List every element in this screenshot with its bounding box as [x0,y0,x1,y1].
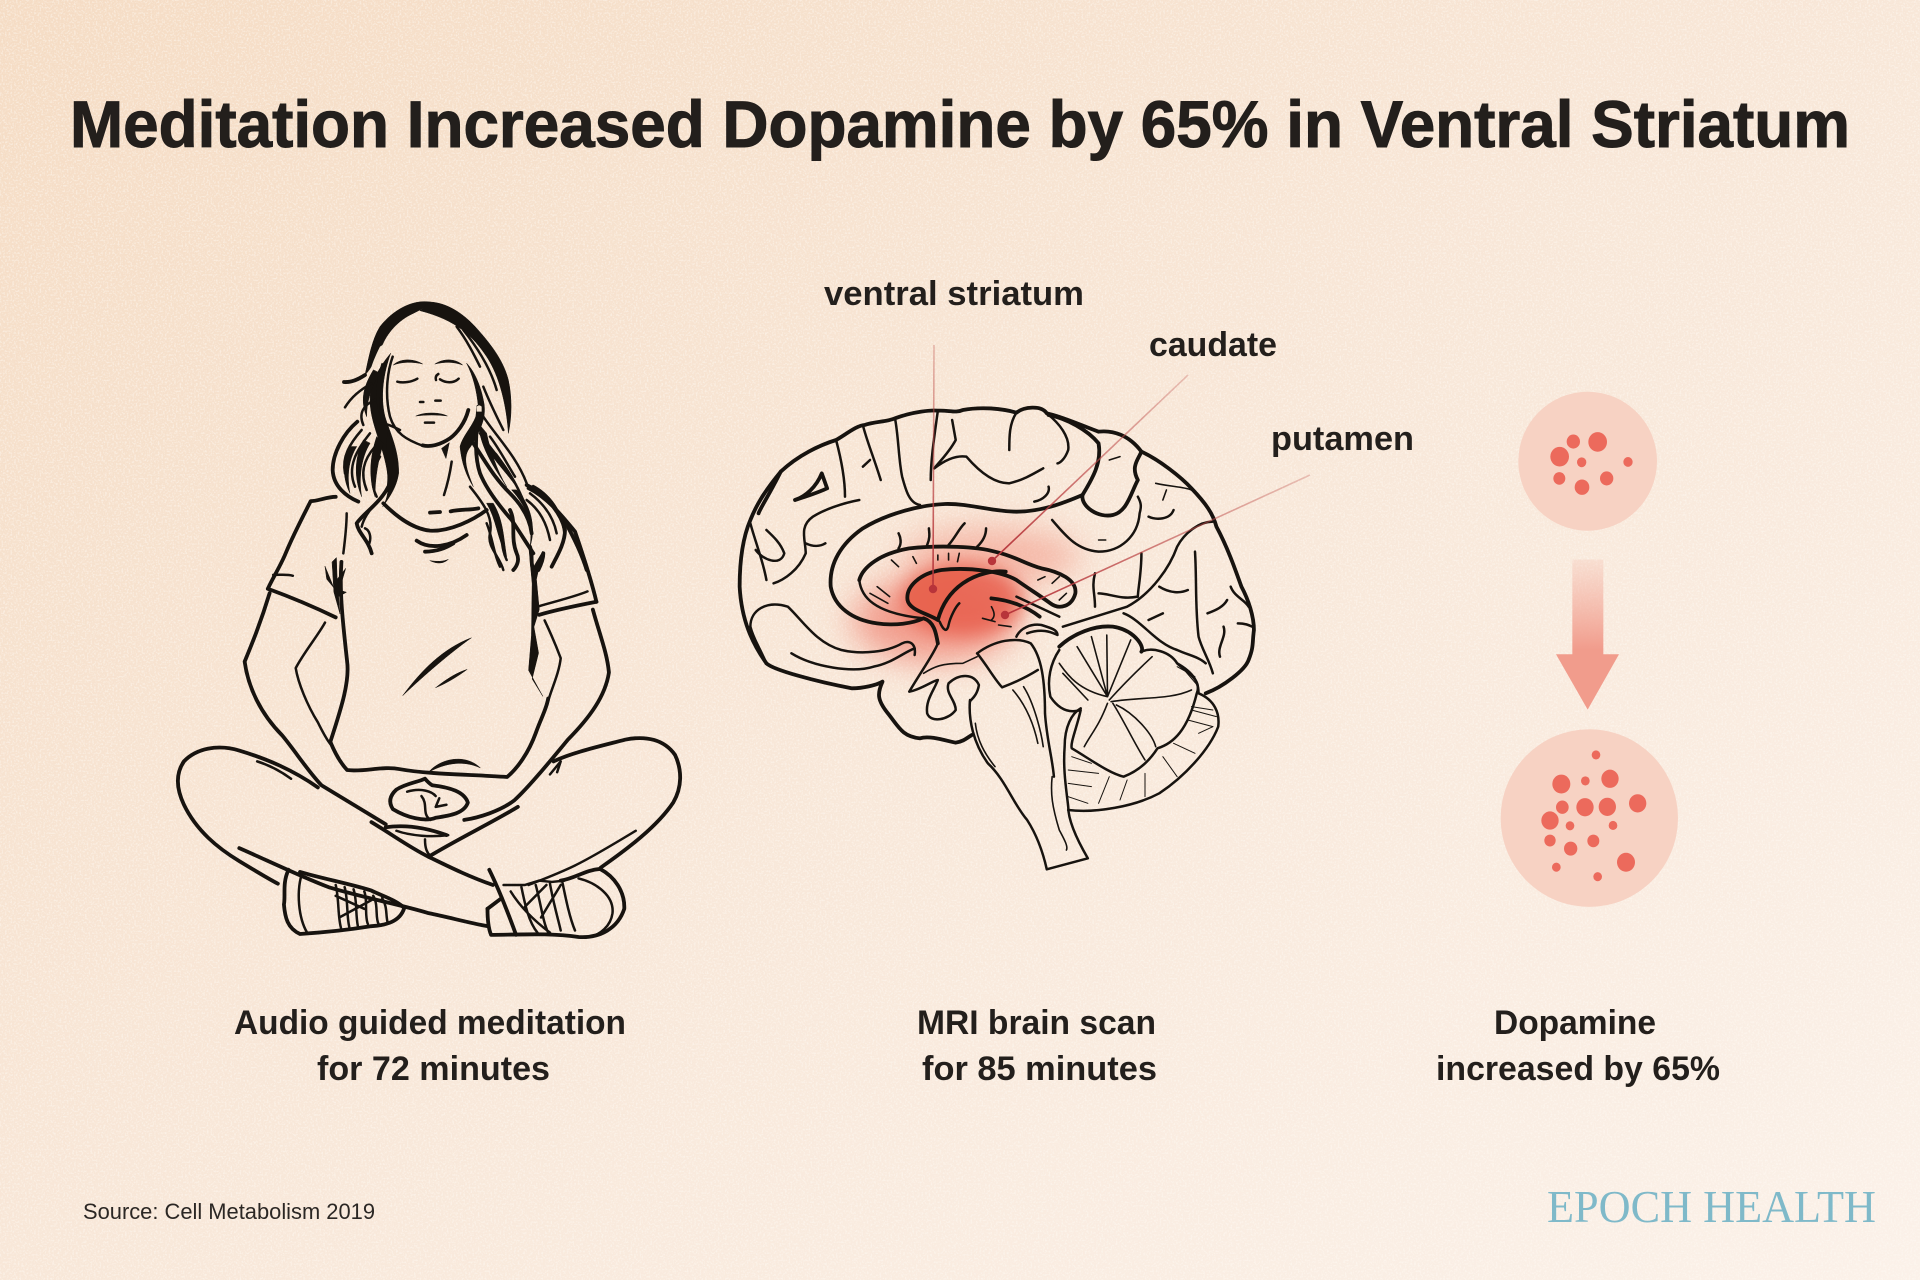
brain line art [740,408,1254,869]
caption: MRI: for 85 minutes [922,1050,1157,1088]
caption: meditation: Audio guided meditation [234,1004,626,1042]
brain label: caudate: caudate [1149,326,1277,364]
leader line: ventral striatum [933,345,934,589]
circle after [1501,729,1678,907]
leader line: caudate [992,375,1188,561]
head and hair [333,302,587,570]
caption: meditation: for 72 minutes [317,1050,550,1088]
leader line: putamen [1005,475,1310,615]
caption: meditation [234,1004,626,1088]
dopamine diagram [1501,392,1678,907]
caption: dopamine: Dopamine [1494,1004,1656,1042]
illustration: brain [740,345,1310,869]
caption: dopamine: increased by 65% [1436,1050,1720,1088]
caption: MRI: MRI brain scan [917,1004,1156,1042]
red activity glow [852,527,1081,663]
circle before [1518,392,1657,531]
source note: Source: Cell Metabolism 2019 [83,1199,375,1224]
logo: Epoch Health: EPOCH HEALTH [1547,1181,1876,1232]
arrow [1556,559,1619,710]
caption: MRI [917,1004,1157,1088]
brain label: ventral striatum: ventral striatum [824,275,1084,313]
body outline [178,488,680,937]
caption: dopamine [1436,1004,1720,1088]
brain label: putamen: putamen [1271,420,1414,458]
title: Meditation Increased Dopamine by 65% in Ventral Striatum [70,87,1850,161]
marker dots [929,557,1009,619]
illustration: meditating woman [178,302,680,937]
